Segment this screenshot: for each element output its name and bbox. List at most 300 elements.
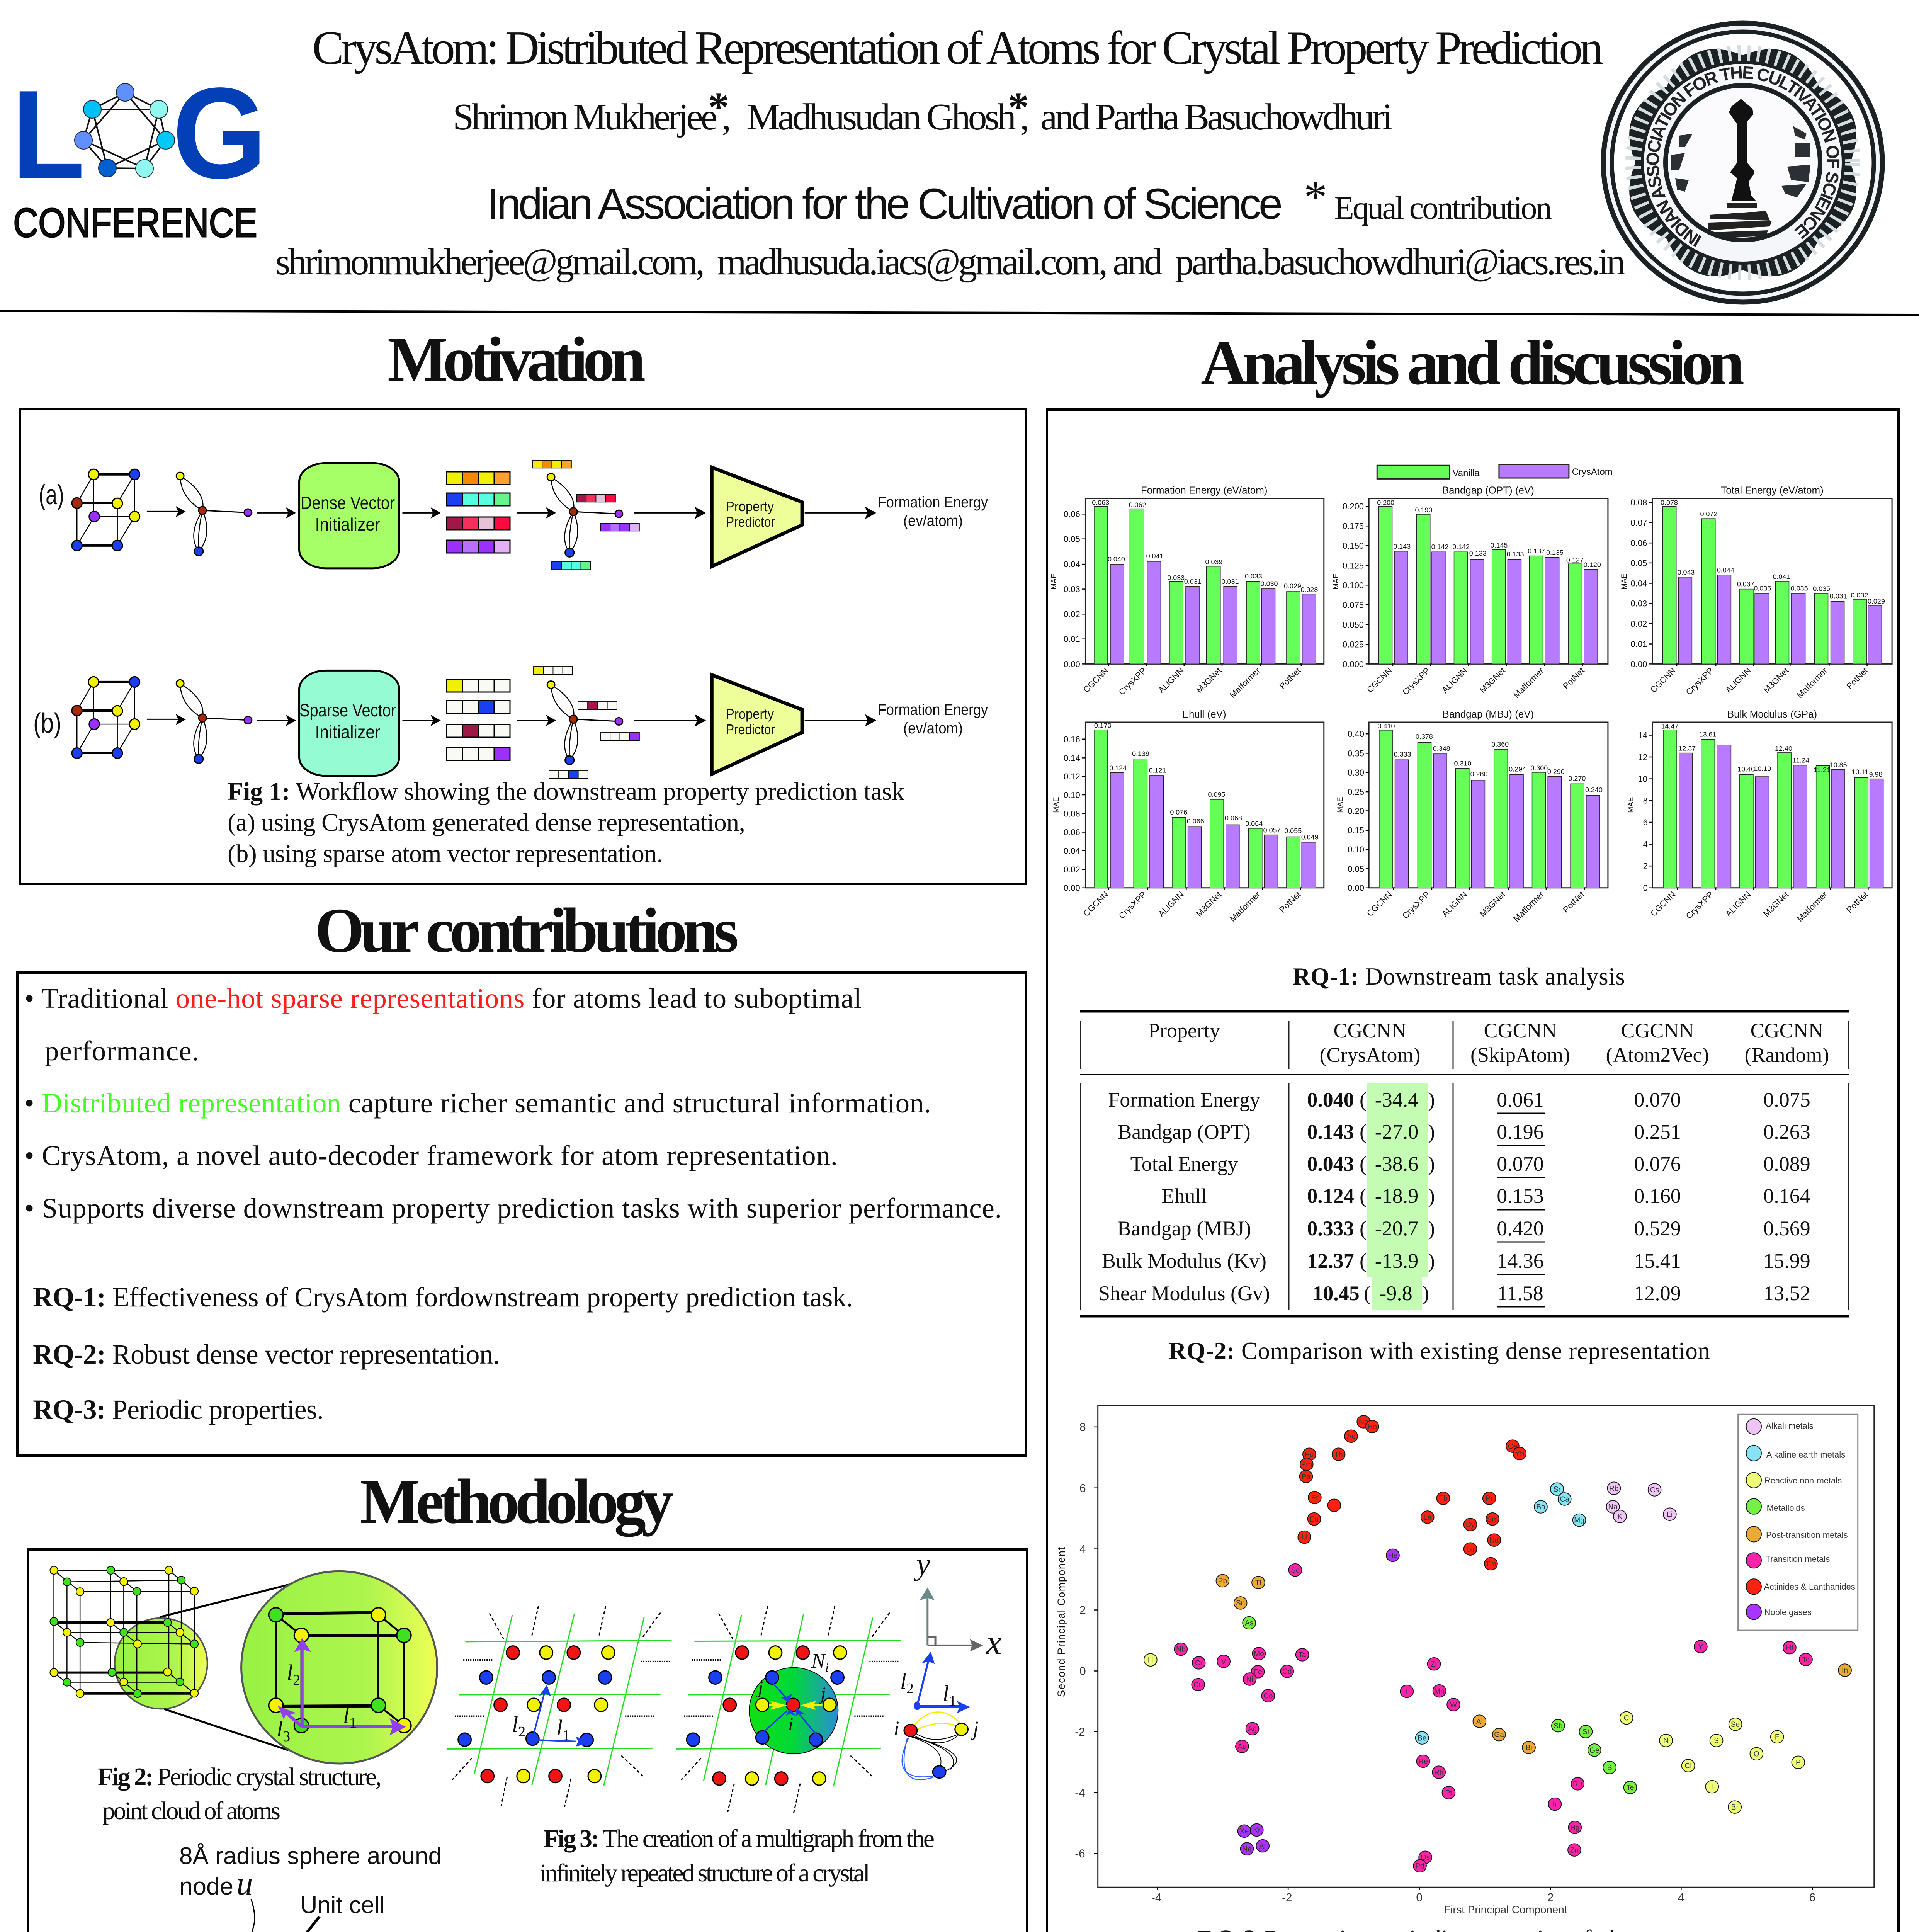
scatter legend: Transition metals	[1766, 1554, 1830, 1564]
fig 3 caption: Fig 3: The creation of a multigraph from the	[544, 1825, 935, 1853]
chart axis labels: CrysXPP	[1117, 889, 1148, 921]
chart: bulk modulus: 4	[1643, 840, 1648, 849]
chart: bandgap OPT: 0.125	[1343, 561, 1364, 570]
chart: formation energy: 0.01	[1064, 634, 1080, 644]
scatter plot RQ-3: 6	[1809, 1891, 1815, 1904]
chart: formation energy: 0.031	[1184, 578, 1202, 585]
scatter plot RQ-3: 6	[1079, 1482, 1086, 1495]
fig 3: multigraph from repeated crystal	[447, 1587, 983, 1813]
fig 1 labels: Formation Energy	[878, 494, 988, 511]
chart: bandgap OPT: 0.200	[1343, 502, 1364, 511]
scatter plot RQ-3: Co	[1263, 1692, 1273, 1700]
scatter plot RQ-3: Ni	[1246, 1675, 1253, 1684]
research questions	[33, 1282, 853, 1425]
chart: bulk modulus: 14.47	[1661, 723, 1678, 730]
chart: bandgap MBJ: 0.290	[1547, 768, 1565, 776]
chart: formation energy: 0.033	[1245, 572, 1262, 580]
chart: bandgap MBJ: 0.348	[1433, 745, 1450, 752]
chart axis labels: MAE	[1050, 573, 1058, 590]
chart: bandgap MBJ: 0.30	[1348, 768, 1364, 777]
chart: total energy: 0.029	[1868, 597, 1885, 605]
chart axis labels: CGCNN	[1365, 666, 1394, 695]
chart axis labels: M3GNet	[1478, 666, 1507, 695]
chart: ehull: 0.06	[1064, 827, 1080, 837]
annotation: sphere radius: node	[179, 1873, 233, 1900]
chart: formation energy: 0.02	[1064, 609, 1080, 619]
logo: LoG conference: G	[172, 61, 267, 205]
table rows: -18.9	[1375, 1184, 1418, 1208]
caption RQ-2: RQ-2: Comparison with existing dense representation	[1169, 1337, 1710, 1364]
chart: total energy: 0.01	[1630, 639, 1647, 649]
scatter plot RQ-3: Y	[1698, 1643, 1703, 1651]
chart: total energy: 0.04	[1630, 578, 1647, 588]
fig 3 labels: 2	[518, 1724, 525, 1740]
chart: total energy: 0.032	[1851, 591, 1868, 599]
chart axis labels	[1050, 573, 1870, 923]
chart: total energy: 0.035	[1754, 585, 1771, 592]
chart: bulk modulus	[1638, 708, 1892, 893]
table rows: Formation Energy	[1108, 1088, 1260, 1111]
chart: bandgap OPT: 0.135	[1546, 549, 1564, 556]
fig 1 caption: (a) using CrysAtom generated dense representation,	[228, 808, 745, 837]
chart: bulk modulus: 8	[1643, 796, 1648, 805]
research questions: RQ-2: Robust dense vector representation.	[33, 1339, 500, 1370]
chart: formation energy: 0.031	[1222, 578, 1239, 585]
chart: total energy: 0.037	[1737, 580, 1754, 588]
scatter plot RQ-3: Si	[1582, 1728, 1589, 1736]
scatter plot RQ-3: Np	[1359, 1418, 1368, 1426]
scatter plot RQ-3: Er	[1311, 1494, 1319, 1502]
fig 3 labels: j	[971, 1717, 979, 1740]
scatter plot RQ-3: Tb	[1439, 1495, 1448, 1503]
chart: bulk modulus: 10	[1638, 774, 1647, 784]
scatter plot RQ-3: Ho	[1367, 1423, 1377, 1431]
chart: bulk modulus: 10.11	[1852, 768, 1868, 776]
scatter y axis label: Second Principal Component	[1056, 1547, 1067, 1697]
fig 2 labels: l	[343, 1703, 349, 1728]
chart: total energy: 0.035	[1813, 585, 1830, 592]
table rows: -20.7	[1375, 1217, 1418, 1240]
authors: Shrimon Mukherjee	[453, 96, 717, 138]
fig 1 caption: Fig 1: Workflow showing the downstream property prediction task	[228, 777, 904, 806]
scatter plot RQ-3: Be	[1418, 1734, 1426, 1742]
scatter plot RQ-3: Tl	[1255, 1579, 1261, 1587]
table rows: 0.070	[1634, 1088, 1681, 1111]
scatter plot RQ-3: F	[1775, 1733, 1780, 1741]
chart: bandgap OPT: 0.200	[1377, 498, 1394, 506]
chart axis labels: M3GNet	[1478, 889, 1507, 918]
table rows: 0.076	[1634, 1152, 1681, 1175]
chart: formation energy: 0.06	[1064, 509, 1080, 519]
authors: and Partha Basuchowdhuri	[1040, 96, 1393, 138]
table rows: Bandgap (OPT)	[1118, 1120, 1251, 1143]
chart: total energy: 0.041	[1773, 573, 1790, 580]
scatter plot RQ-3: H	[1148, 1656, 1153, 1664]
fig 1 labels: Formation Energy	[878, 701, 988, 718]
table rows: Ehull	[1161, 1184, 1207, 1208]
scatter legend: Post-transition metals	[1766, 1530, 1848, 1540]
chart: bulk modulus: 12.40	[1775, 745, 1792, 752]
research questions: RQ-1: Effectiveness of CrysAtom fordownstream property prediction task.	[33, 1282, 853, 1313]
table rows: )	[1428, 1152, 1435, 1175]
chart: bulk modulus: Bulk Modulus (GPa)	[1727, 708, 1817, 720]
fig 1 diagram shapes	[72, 463, 875, 776]
chart: bulk modulus: 9.98	[1869, 770, 1882, 778]
chart: formation energy: 0.030	[1261, 580, 1278, 588]
table rows: 0.251	[1634, 1120, 1681, 1143]
table rows: (	[1360, 1120, 1367, 1143]
table rows: 0.529	[1634, 1217, 1681, 1240]
table rows: (	[1360, 1249, 1367, 1272]
scatter plot RQ-3: B	[1607, 1764, 1612, 1772]
chart: formation energy: 0.029	[1284, 582, 1301, 590]
fig 1 labels: Predictor	[726, 514, 775, 530]
chart axis labels: CrysXPP	[1117, 666, 1148, 697]
scatter plot RQ-3: Cl	[1685, 1762, 1692, 1770]
annotation arrows	[209, 1899, 320, 1932]
scatter plot RQ-3: N	[1663, 1737, 1669, 1745]
chart: bandgap OPT: 0.075	[1343, 600, 1364, 610]
authors: *	[1008, 83, 1029, 131]
scatter plot RQ-3: -4	[1151, 1891, 1161, 1904]
scatter plot RQ-3: W	[1450, 1701, 1457, 1709]
table header: CGCNN	[1621, 1019, 1694, 1042]
chart axis labels: M3GNet	[1761, 889, 1791, 918]
fig 3 labels: N	[811, 1649, 825, 1672]
chart: bandgap MBJ: 0.25	[1348, 787, 1364, 797]
chart: total energy: 0.044	[1717, 566, 1734, 574]
table rows: )	[1428, 1088, 1435, 1111]
heading: Motivation: Motivation	[388, 324, 646, 395]
chart: formation energy: Formation Energy (eV/atom)	[1141, 485, 1267, 496]
scatter plot RQ-3: Ag	[1248, 1725, 1257, 1733]
authors: Madhusudan Ghosh	[746, 96, 1016, 138]
scatter plot RQ-3: O	[1754, 1750, 1759, 1759]
contribution bullets: • Supports diverse downstream property prediction tasks with superior performance.	[24, 1192, 1002, 1224]
fig 2 labels: 2	[293, 1672, 300, 1688]
scatter plot RQ-3: Ge	[1589, 1747, 1599, 1755]
chart: bulk modulus: 14	[1638, 730, 1647, 740]
chart: formation energy: 0.028	[1300, 586, 1318, 594]
sparse vectors row b	[447, 667, 639, 778]
scatter plot RQ-3: Na	[1608, 1503, 1618, 1511]
scatter plot RQ-3: Li	[1667, 1510, 1673, 1519]
panel: contributions	[17, 973, 1026, 1456]
chart: ehull: 0.04	[1064, 846, 1080, 855]
chart axis labels: M3GNet	[1194, 666, 1224, 695]
chart: bandgap OPT: 0.050	[1343, 620, 1364, 629]
chart: ehull: 0.02	[1064, 865, 1080, 874]
table header: (Atom2Vec)	[1606, 1043, 1709, 1066]
chart legend: CrysAtom	[1572, 467, 1613, 477]
chart: ehull: 0.057	[1263, 826, 1281, 834]
scatter plot RQ-3: Pa	[1302, 1473, 1311, 1481]
chart: total energy: 0.078	[1661, 498, 1678, 506]
contribution bullets	[24, 983, 1002, 1224]
chart axis labels: PotNet	[1844, 666, 1870, 691]
fig 2 labels: 3	[283, 1728, 290, 1745]
fig 3 labels: 2	[906, 1680, 914, 1697]
chart: bandgap MBJ: 0.300	[1530, 764, 1548, 772]
chart axis labels: CrysXPP	[1401, 889, 1432, 921]
caption RQ-1: RQ-1: Downstream task analysis	[1293, 963, 1625, 990]
chart axis labels: Matformer	[1511, 666, 1546, 700]
chart: bandgap OPT: 0.120	[1584, 561, 1601, 568]
table rows: 0.089	[1763, 1152, 1810, 1175]
seal: Indian Association for the Cultivation of Science: INDIAN ASSOCIATION FOR THE CULTIVATION OF SCIENCE	[1642, 62, 1844, 251]
chart: bandgap OPT: 0.190	[1415, 506, 1432, 514]
scatter plot RQ-3: Sc	[1291, 1566, 1300, 1575]
fig 1 labels: Property	[726, 706, 774, 722]
table rows: (	[1360, 1152, 1367, 1175]
fig 1 labels: Predictor	[726, 721, 775, 737]
scatter legend: Reactive non-metals	[1764, 1476, 1842, 1485]
chart: formation energy: 0.05	[1064, 534, 1080, 544]
table rows	[1098, 1088, 1810, 1307]
chart: ehull: 0.08	[1064, 809, 1080, 819]
chart: bandgap MBJ: 0.333	[1394, 750, 1411, 758]
chart: ehull: 0.049	[1301, 833, 1319, 841]
table header: CGCNN	[1484, 1019, 1557, 1042]
fig 1 labels: (ev/atom)	[903, 720, 963, 737]
fig 3 labels: y	[914, 1548, 930, 1582]
chart: bandgap MBJ: 0.20	[1348, 806, 1364, 816]
scatter plot RQ-3: In	[1842, 1667, 1848, 1675]
chart: bandgap OPT: 0.137	[1528, 547, 1545, 555]
chart: total energy: 0.043	[1678, 568, 1695, 576]
annotation: sphere radius: 8Å radius sphere around	[179, 1843, 442, 1869]
chart: ehull: 0.170	[1094, 721, 1112, 729]
chart: bandgap OPT: 0.175	[1343, 521, 1364, 531]
scatter plot RQ-3: Rh	[1434, 1769, 1443, 1777]
table rows: -13.9	[1375, 1249, 1418, 1272]
research questions: RQ-3: Periodic properties.	[33, 1394, 324, 1425]
chart axis labels: CGCNN	[1649, 889, 1678, 918]
scatter plot RQ-3: Sm	[1487, 1515, 1498, 1524]
fig 3 labels: i	[788, 1714, 793, 1735]
table rows: 15.99	[1763, 1249, 1810, 1272]
scatter legend: Metalloids	[1767, 1503, 1805, 1513]
fig 1 labels: Sparse Vector	[299, 700, 396, 720]
chart axis labels: PotNet	[1277, 889, 1303, 915]
chart: ehull: 0.124	[1109, 764, 1127, 772]
chart axis labels: ALIGNN	[1440, 889, 1469, 918]
chart: ehull: 0.064	[1245, 820, 1263, 828]
chart: total energy: 0.035	[1791, 585, 1808, 592]
chart: formation energy: 0.04	[1064, 560, 1080, 569]
heading: Our contributions: Our contributions	[315, 895, 739, 966]
chart: bandgap OPT: 0.133	[1507, 550, 1524, 558]
heading: Methodology: Methodology	[360, 1466, 673, 1537]
chart axis labels: M3GNet	[1761, 666, 1791, 695]
table rows: 0.061	[1497, 1088, 1544, 1111]
scatter plot RQ-3: Pd	[1415, 1862, 1424, 1870]
chart: bulk modulus: 13.61	[1699, 730, 1717, 738]
table rows: 0.153	[1497, 1184, 1544, 1208]
scatter plot RQ-3: Tm	[1486, 1560, 1496, 1568]
fig 1 labels: Dense Vector	[301, 493, 395, 513]
table rows: 10.45	[1312, 1282, 1360, 1305]
chart axis labels: CGCNN	[1081, 889, 1110, 918]
scatter legend: Alkaline earth metals	[1766, 1450, 1845, 1459]
chart axis labels: CrysXPP	[1684, 889, 1715, 921]
scatter plot RQ-3: Ba	[1536, 1503, 1545, 1511]
chart: total energy: 0.00	[1630, 659, 1647, 669]
fig 3 labels: 1	[563, 1727, 570, 1743]
chart: bulk modulus: 10.40	[1737, 765, 1755, 773]
table rows: 11.58	[1497, 1282, 1543, 1305]
chart: total energy: 0.072	[1700, 510, 1717, 518]
logo: LoG conference: L	[12, 64, 85, 204]
authors	[453, 83, 1393, 138]
heading: Analysis and discussion: Analysis and discussion	[1201, 327, 1744, 398]
scatter plot RQ-3: 0	[1079, 1665, 1086, 1678]
scatter plot RQ-3: Eu	[1310, 1515, 1319, 1524]
affiliation: Indian Association for the Cultivation of Science	[487, 180, 1283, 228]
fig 1 labels: Initializer	[315, 514, 380, 534]
chart: bandgap OPT: 0.133	[1469, 549, 1487, 557]
scatter plot RQ-3: Ru	[1573, 1780, 1582, 1788]
chart: total energy: 0.031	[1830, 592, 1847, 600]
chart: bandgap MBJ: 0.00	[1348, 883, 1364, 893]
chart: bandgap OPT: 0.100	[1343, 580, 1364, 590]
fig 3 labels: l	[900, 1668, 906, 1694]
chart: formation energy: 0.00	[1064, 659, 1080, 669]
scatter plot RQ-3: Ir	[1553, 1801, 1557, 1809]
chart: bulk modulus: 0	[1643, 883, 1648, 893]
scatter plot RQ-3: K	[1617, 1513, 1622, 1521]
table rows: (	[1360, 1184, 1367, 1208]
scatter plot RQ-3: Ac	[1347, 1432, 1356, 1440]
chart axis labels: MAE	[1332, 573, 1340, 590]
chart axis labels: Matformer	[1228, 889, 1262, 923]
scatter plot RQ-3: Ne	[1242, 1845, 1252, 1853]
fig 2: periodic crystal	[50, 1566, 437, 1764]
fig 1 caption: (b) using sparse atom vector representation.	[228, 840, 663, 868]
fig 3 labels: j	[756, 1677, 763, 1698]
chart axis labels: MAE	[1052, 797, 1061, 813]
table header: (Random)	[1745, 1043, 1829, 1066]
scatter plot RQ-3: Fe	[1253, 1668, 1262, 1676]
fig 3 labels: 1	[949, 1693, 956, 1709]
table rows: 12.37	[1307, 1249, 1354, 1272]
table rows: )	[1428, 1120, 1435, 1143]
fig 1 labels: Property	[726, 498, 774, 514]
scatter plot RQ-3	[1075, 1406, 1874, 1915]
chart: total energy: 0.06	[1630, 538, 1647, 548]
table rows: )	[1428, 1217, 1435, 1240]
emails: shrimonmukherjee@gmail.com, madhusuda.iacs@gmail.com, and partha.basuchowdhuri@iacs.res.in	[275, 241, 1625, 283]
logo: LoG conference: CONFERENCE	[13, 200, 257, 246]
scatter plot RQ-3: 8	[1079, 1421, 1086, 1434]
chart: bandgap MBJ: 0.40	[1348, 729, 1364, 739]
table rows: 15.41	[1634, 1249, 1681, 1272]
scatter plot RQ-3: Kr	[1253, 1827, 1261, 1835]
scatter plot RQ-3: Mo	[1254, 1650, 1264, 1658]
table header: (CrysAtom)	[1320, 1043, 1420, 1066]
chart: formation energy: 0.040	[1108, 555, 1125, 563]
table rows: -9.8	[1379, 1282, 1412, 1305]
scatter plot RQ-3: Zn	[1570, 1846, 1579, 1854]
scatter plot RQ-3: Cd	[1282, 1668, 1292, 1676]
scatter plot RQ-3: Pr	[1486, 1495, 1493, 1503]
chart: bandgap MBJ: 0.280	[1470, 770, 1487, 778]
scatter plot RQ-3: Tc	[1802, 1656, 1810, 1664]
panel: methodology	[20, 1548, 1027, 1932]
fig 3 labels: i	[894, 1717, 899, 1740]
scatter plot RQ-3: Se	[1731, 1721, 1740, 1729]
scatter plot RQ-3: Th	[1334, 1451, 1343, 1459]
fig 1 caption	[228, 777, 904, 868]
chart: bandgap OPT	[1343, 485, 1608, 669]
chart legend: Vanilla	[1453, 468, 1480, 478]
table header: Property	[1148, 1019, 1220, 1042]
chart: total energy	[1630, 485, 1892, 669]
chart axis labels: CGCNN	[1081, 666, 1110, 695]
scatter plot RQ-3: Zr	[1431, 1660, 1438, 1668]
scatter plot RQ-3: U	[1302, 1534, 1307, 1542]
header rule	[0, 310, 1919, 316]
chart: bandgap OPT: 0.150	[1343, 541, 1364, 551]
chart: bulk modulus: 12.37	[1678, 744, 1696, 752]
contribution bullets: • CrysAtom, a novel auto-decoder framework for atom representation.	[24, 1140, 838, 1171]
chart axis labels: CGCNN	[1365, 889, 1394, 918]
fig 2 labels	[277, 1660, 357, 1745]
fig 1 labels	[33, 480, 988, 742]
table header	[1148, 1019, 1829, 1066]
table header: CGCNN	[1750, 1019, 1824, 1042]
scatter plot RQ-3: Ta	[1299, 1651, 1306, 1659]
authors: ,	[1020, 96, 1029, 138]
scatter legend: Alkali metals	[1766, 1421, 1814, 1431]
chart axis labels: ALIGNN	[1440, 666, 1469, 695]
chart: ehull: 0.055	[1284, 827, 1302, 835]
scatter plot RQ-3: Ca	[1560, 1495, 1569, 1503]
chart axis labels: Matformer	[1795, 666, 1829, 700]
chart: bulk modulus: 10.85	[1830, 761, 1847, 769]
scatter plot RQ-3: C	[1624, 1714, 1629, 1723]
table RQ-2	[1080, 1011, 1849, 1316]
scatter plot RQ-3: Cr	[1195, 1659, 1203, 1667]
fig 3 labels: j	[818, 1684, 826, 1704]
logo: LoG conference	[12, 61, 267, 246]
annotation: unit cell: Unit cell	[300, 1892, 385, 1918]
chart axis labels: CGCNN	[1649, 666, 1678, 695]
chart axis labels: Matformer	[1795, 889, 1829, 923]
table rows: 0.569	[1763, 1217, 1810, 1240]
fig 3 caption: infinitely repeated structure of a crystal	[540, 1859, 870, 1887]
chart: bandgap MBJ: 0.410	[1378, 722, 1395, 730]
panel: Fig 1 workflow	[20, 409, 1026, 884]
table rows: Bandgap (MBJ)	[1117, 1217, 1251, 1240]
chart: bandgap OPT: 0.143	[1393, 543, 1411, 550]
chart axis labels: PotNet	[1561, 666, 1586, 691]
scatter plot RQ-3: As	[1245, 1619, 1253, 1628]
header	[0, 21, 1919, 316]
affiliation: *	[1304, 171, 1327, 223]
scatter plot RQ-3: Nd	[1489, 1536, 1499, 1544]
scatter plot RQ-3: 4	[1079, 1543, 1086, 1556]
chart legend	[1377, 464, 1613, 479]
chart: ehull: 0.12	[1064, 772, 1080, 781]
chart: bandgap MBJ: 0.270	[1569, 774, 1586, 782]
chart: bandgap MBJ: 0.15	[1348, 826, 1364, 835]
scatter plot RQ-3: Pt	[1445, 1789, 1452, 1797]
chart axis labels: MAE	[1336, 797, 1344, 813]
chart: formation energy: 0.033	[1167, 574, 1185, 582]
scatter plot RQ-3: 0	[1416, 1891, 1423, 1904]
scatter plot RQ-3: Te	[1626, 1784, 1634, 1792]
